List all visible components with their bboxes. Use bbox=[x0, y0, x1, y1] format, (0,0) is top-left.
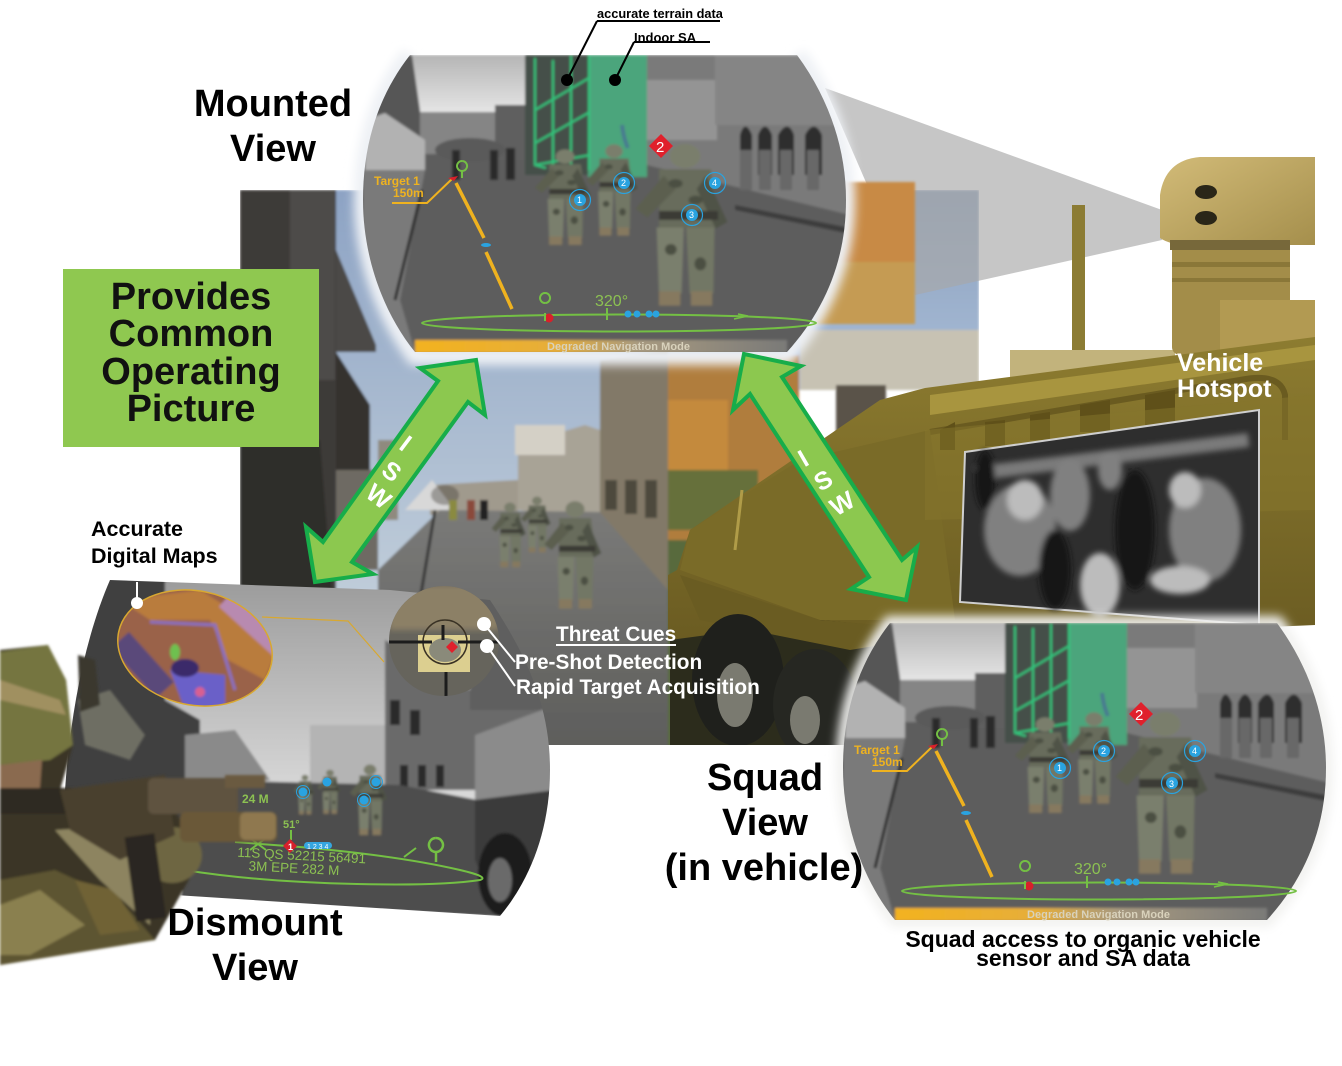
panel: squad view bbox=[840, 623, 1330, 923]
label: accurate digital maps: Digital Maps bbox=[91, 544, 218, 568]
label: accurate digital maps: Accurate bbox=[91, 517, 183, 541]
body base bbox=[0, 645, 200, 965]
panel: dismount view bbox=[60, 575, 555, 920]
hud: dismount: 11S QS 52215 56491 bbox=[237, 845, 366, 866]
hud: squad: 3 bbox=[1169, 779, 1174, 789]
turret base bbox=[1172, 240, 1290, 355]
hud: mounted: 4 bbox=[712, 178, 717, 188]
hud: dismount: 51° bbox=[283, 819, 300, 831]
callout: provides common operating picture: Picture bbox=[127, 388, 255, 430]
arrow: ISW right bbox=[733, 354, 917, 600]
hud: squad bbox=[854, 702, 1296, 921]
hud: squad: 2 bbox=[1135, 707, 1143, 724]
hud: squad: 1 bbox=[1057, 763, 1062, 773]
panel: mounted view bbox=[360, 55, 850, 356]
callout: rapid target acquisition: Rapid Target Acquisition bbox=[516, 676, 760, 699]
hud: dismount: 1 2 3 4 bbox=[307, 844, 329, 851]
sensor beam bbox=[825, 88, 1162, 295]
inset: threat scope bbox=[389, 585, 499, 700]
hud: dismount bbox=[184, 776, 482, 884]
label: range 24 M: 24 M bbox=[242, 792, 269, 806]
hud: dismount: 1 bbox=[288, 842, 293, 852]
callout: provides common operating picture: Provides bbox=[111, 276, 271, 318]
hud: mounted: 2 bbox=[621, 178, 626, 188]
hud: mounted: 2 bbox=[656, 139, 664, 156]
hud: mounted: 150m bbox=[393, 186, 424, 200]
annotation: indoor SA bbox=[609, 30, 710, 86]
orange building bbox=[815, 182, 915, 324]
caption: squad access: Squad access to organic vehicle bbox=[905, 926, 1261, 952]
callout: provides common operating picture bbox=[63, 269, 319, 447]
arrow: ISW left: S bbox=[376, 456, 406, 488]
stock and rifle bbox=[0, 788, 75, 814]
inset: digital map bbox=[117, 589, 384, 707]
label: accurate digital maps bbox=[91, 517, 218, 609]
heading: dismount view: Dismount bbox=[167, 902, 343, 944]
glove and sleeve bbox=[55, 826, 150, 925]
hud: mounted: 320° bbox=[595, 293, 628, 310]
hud: mounted: 1 bbox=[577, 195, 582, 205]
hull bbox=[668, 337, 1315, 640]
hud: mounted: Target 1 bbox=[374, 174, 420, 188]
optic bbox=[78, 690, 145, 760]
hud: mounted bbox=[374, 134, 816, 353]
hud: squad: Target 1 bbox=[854, 743, 900, 757]
arrow: ISW left: I bbox=[394, 431, 417, 457]
hud: squad: 4 bbox=[1192, 746, 1197, 756]
annotation: accurate terrain data: accurate terrain data bbox=[597, 6, 724, 21]
camo jacket bbox=[0, 870, 155, 965]
illustration: soldier with rifle bbox=[0, 645, 277, 965]
label: vehicle hotspot: Hotspot bbox=[1177, 375, 1272, 403]
caption: squad access: sensor and SA data bbox=[976, 945, 1190, 971]
hud: squad: 150m bbox=[872, 755, 903, 769]
antenna bbox=[1072, 205, 1085, 370]
illustration: vehicle bbox=[668, 157, 1315, 775]
callout: provides common operating picture: Common bbox=[109, 313, 273, 355]
heading: squad view: View bbox=[722, 802, 808, 844]
hud: squad: 320° bbox=[1074, 861, 1107, 878]
arrow: ISW right: W bbox=[825, 486, 860, 522]
hud: dismount: 3M EPE 282 M bbox=[248, 858, 340, 878]
right half background bbox=[668, 190, 979, 390]
arrow: ISW left: W bbox=[361, 479, 397, 515]
panel: vehicle hotspot screen bbox=[960, 410, 1259, 625]
heading: squad view: (in vehicle) bbox=[665, 847, 863, 889]
heading: threat cues: Threat Cues bbox=[556, 623, 676, 646]
heading: mounted view bbox=[194, 83, 352, 170]
heading: squad view: Squad bbox=[707, 757, 823, 799]
heading: dismount view: View bbox=[212, 947, 298, 989]
caption: squad access bbox=[905, 926, 1261, 971]
hud: squad: Degraded Navigation Mode bbox=[1027, 909, 1170, 921]
turret dome bbox=[1160, 157, 1315, 245]
hud: squad: 2 bbox=[1101, 746, 1106, 756]
hud: mounted: Degraded Navigation Mode bbox=[547, 341, 690, 353]
arrow: ISW right: I bbox=[793, 445, 814, 473]
callout: pre-shot detection bbox=[477, 617, 702, 674]
heading: mounted view: Mounted bbox=[194, 83, 352, 125]
arrow: ISW left bbox=[306, 360, 485, 582]
label: vehicle hotspot bbox=[1177, 349, 1272, 403]
annotation: accurate terrain data bbox=[561, 6, 724, 86]
heading: mounted view: View bbox=[230, 128, 316, 170]
heading: squad view bbox=[665, 757, 863, 889]
callout: rapid target acquisition bbox=[480, 639, 760, 699]
callout: pre-shot detection: Pre-Shot Detection bbox=[515, 651, 702, 674]
label: vehicle hotspot: Vehicle bbox=[1177, 349, 1263, 377]
heading: dismount view bbox=[167, 902, 343, 989]
hud: mounted: 3 bbox=[689, 210, 694, 220]
annotation: indoor SA: Indoor SA bbox=[634, 30, 697, 45]
arrow: ISW right: S bbox=[809, 465, 838, 497]
callout: provides common operating picture: Operating bbox=[101, 351, 281, 393]
helmet bbox=[0, 645, 73, 765]
panel: central street scene bbox=[240, 190, 979, 750]
